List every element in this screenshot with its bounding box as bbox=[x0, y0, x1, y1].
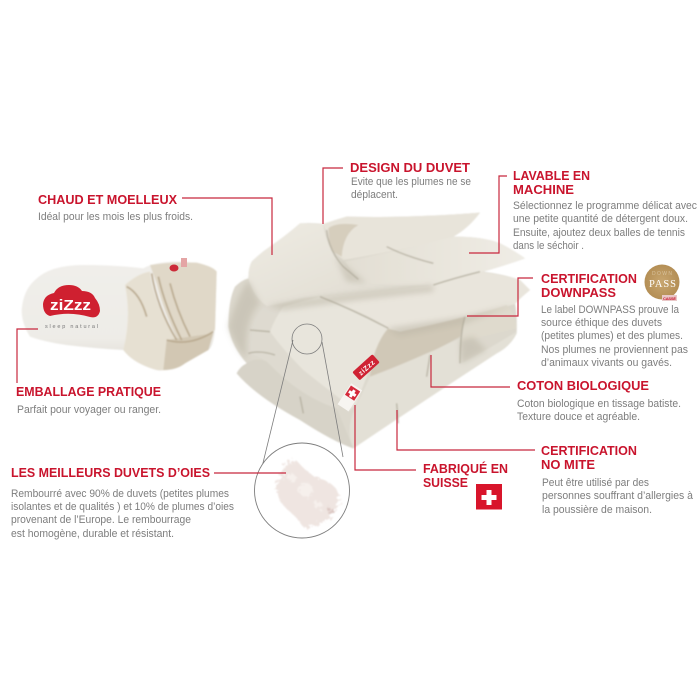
badge: downpass: PASS bbox=[649, 279, 676, 290]
text: fabriqué en suisse: FABRIQUÉ EN bbox=[423, 461, 508, 476]
text: coton biologique: COTON BIOLOGIQUE bbox=[517, 379, 649, 393]
duvet red tag: ziZzz bbox=[358, 359, 377, 377]
text: design du duvet: Evite que les plumes ne se bbox=[351, 176, 471, 188]
text: certification downpass: CERTIFICATION bbox=[541, 272, 637, 286]
back pillow bbox=[323, 213, 480, 260]
text: lavable en machine: une petite quantité de détergent doux. bbox=[513, 213, 688, 225]
illustration: packed duvet roll bbox=[22, 262, 217, 370]
illustration: folded duvet bbox=[228, 213, 530, 448]
text: les meilleurs duvets d'oies: Rembourré avec 90% de duvets (petites plumes bbox=[11, 488, 229, 500]
top flap bbox=[248, 223, 433, 306]
text: les meilleurs duvets d'oies: provenant de l’Europe. Le rembourrage bbox=[11, 514, 191, 526]
bottom pad bbox=[350, 332, 517, 448]
text: les meilleurs duvets d'oies: LES MEILLEURS DUVETS D’OIES bbox=[11, 466, 210, 480]
text: design du duvet: déplacent. bbox=[351, 189, 398, 201]
roll beige fold bbox=[123, 272, 185, 370]
text: certification no mite bbox=[541, 444, 694, 516]
folds and creases bbox=[248, 230, 480, 423]
roll body bbox=[22, 262, 217, 370]
roll lower bundle bbox=[163, 333, 213, 370]
roll creases bbox=[127, 273, 213, 342]
duvet red tag bbox=[352, 354, 380, 380]
front flap with label bbox=[270, 297, 388, 412]
soft shadows bbox=[228, 257, 515, 363]
text: certification downpass bbox=[541, 272, 688, 369]
text: lavable en machine: dans le séchoir . bbox=[513, 240, 584, 252]
text: certification downpass: (petites plumes) et des plumes. bbox=[541, 330, 683, 342]
back pillow beige inner bbox=[328, 224, 358, 257]
text: emballage pratique bbox=[16, 385, 161, 416]
logo: ziZzz cloud: ziZzz bbox=[50, 297, 91, 314]
magnifier: small circle and zoom lines bbox=[262, 324, 343, 467]
text: certification no mite: personnes souffrant d’allergies à bbox=[542, 490, 694, 502]
magnifier: large circle bbox=[254, 443, 350, 538]
text: chaud et moelleux: CHAUD ET MOELLEUX bbox=[38, 193, 178, 207]
leader lines bbox=[17, 168, 535, 473]
duvet Swiss label bbox=[338, 383, 362, 411]
roll outer fold bbox=[150, 262, 217, 342]
text: fabriqué en suisse bbox=[423, 461, 508, 490]
lower right band bbox=[462, 305, 517, 342]
text: les meilleurs duvets d'oies bbox=[11, 466, 234, 540]
text: les meilleurs duvets d'oies: isolantes et de qualités ) et 10% de plumes d’oies bbox=[11, 501, 234, 513]
badge: downpass bbox=[644, 264, 680, 301]
text: certification downpass: source éthique des duvets bbox=[541, 317, 662, 329]
text: certification downpass: DOWNPASS bbox=[541, 286, 616, 300]
logo tagline: sleep natural bbox=[45, 324, 98, 330]
third layer bbox=[320, 272, 530, 332]
text: certification downpass: d’animaux vivants ou gavés. bbox=[541, 357, 672, 369]
bottom left pad bbox=[237, 360, 353, 448]
text: design du duvet bbox=[350, 161, 471, 201]
duvet silhouette bbox=[228, 213, 530, 448]
second pillow bbox=[345, 237, 525, 286]
beige inner layer bbox=[370, 317, 465, 377]
text: certification no mite: Peut être utilisé par des bbox=[542, 477, 649, 489]
left bunch bbox=[248, 306, 342, 413]
roll tag bbox=[170, 258, 187, 272]
logo: ziZzz cloud bbox=[43, 285, 100, 317]
text: chaud et moelleux bbox=[38, 193, 193, 223]
text: certification no mite: la poussière de maison. bbox=[542, 504, 652, 516]
text: design du duvet: DESIGN DU DUVET bbox=[350, 161, 470, 175]
badge: downpass: DOWN bbox=[652, 271, 672, 277]
text: les meilleurs duvets d'oies: est homogène, durable et résistant. bbox=[11, 528, 174, 540]
text: lavable en machine: Ensuite, ajoutez deux balles de tennis bbox=[513, 227, 685, 239]
text: coton biologique: Texture douce et agréable. bbox=[517, 411, 640, 423]
text: lavable en machine: MACHINE bbox=[513, 183, 574, 197]
text: coton biologique: Coton biologique en tissage batiste. bbox=[517, 398, 681, 410]
text: coton biologique bbox=[517, 379, 681, 423]
text: chaud et moelleux: Idéal pour les mois les plus froids. bbox=[38, 211, 193, 223]
text: certification no mite: CERTIFICATION bbox=[541, 444, 637, 458]
text: lavable en machine: LAVABLE EN bbox=[513, 169, 590, 183]
text: emballage pratique: EMBALLAGE PRATIQUE bbox=[16, 385, 161, 399]
text: fabriqué en suisse: SUISSE bbox=[423, 476, 468, 490]
illustration: down feathers bbox=[276, 461, 340, 528]
text: certification downpass: Le label DOWNPASS prouve la bbox=[541, 304, 680, 316]
text: certification downpass: Nos plumes ne proviennent pas bbox=[541, 344, 688, 356]
text: certification no mite: NO MITE bbox=[541, 458, 595, 472]
badge: downpass: CASSÉ bbox=[663, 296, 676, 301]
text: lavable en machine bbox=[513, 169, 697, 252]
text: emballage pratique: Parfait pour voyager ou ranger. bbox=[17, 404, 161, 416]
icon: swiss flag bbox=[476, 484, 502, 510]
